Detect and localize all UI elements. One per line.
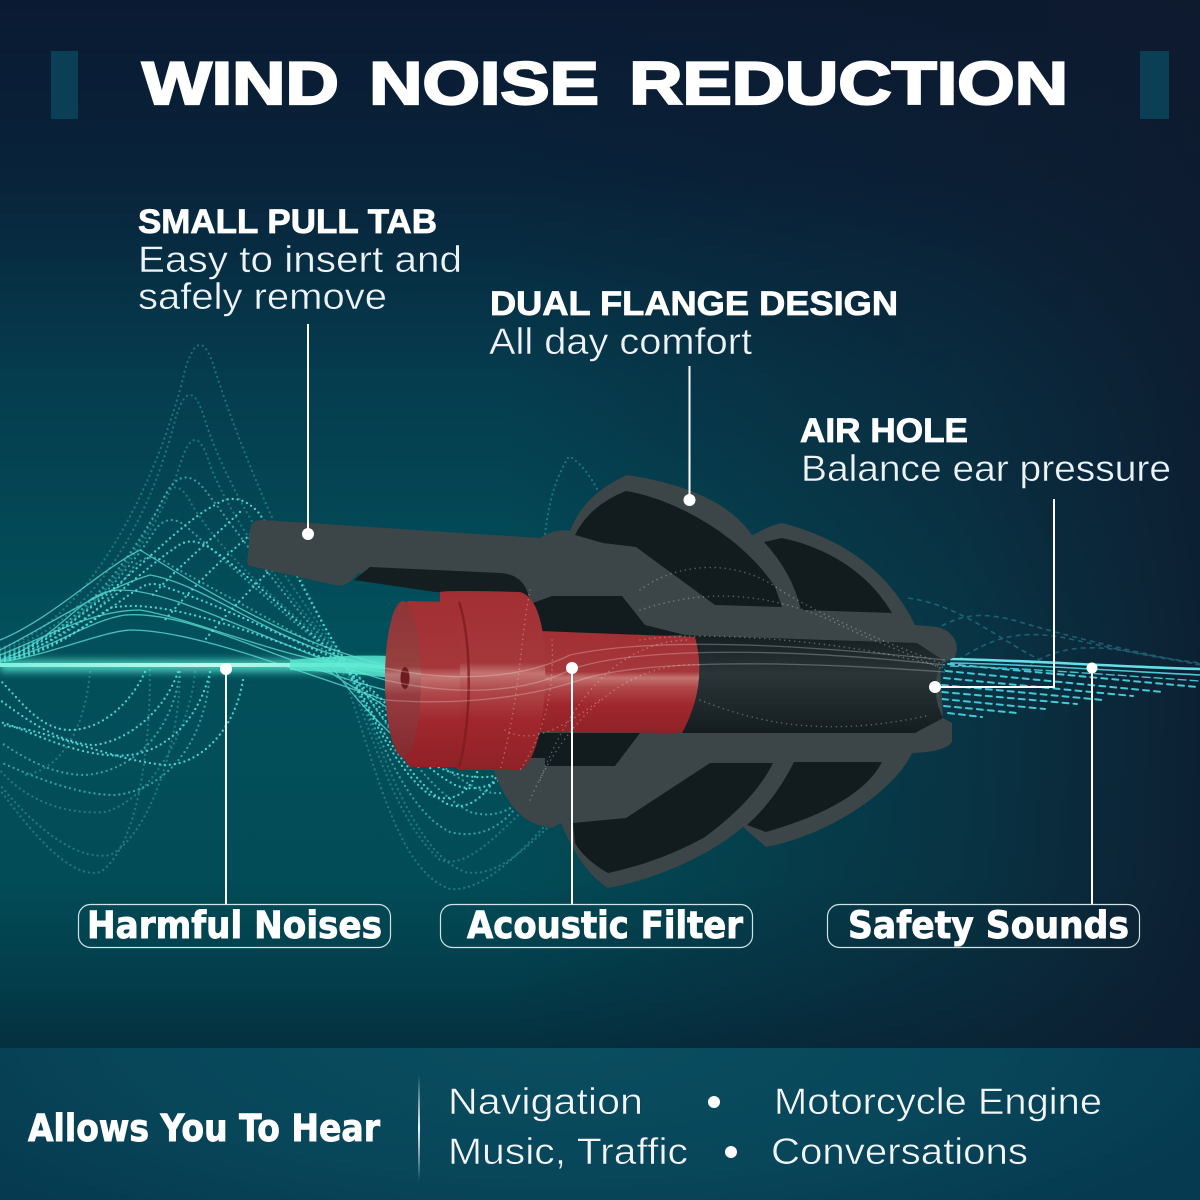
leader: pull tab xyxy=(302,324,314,540)
acoustic filter: red collar xyxy=(440,591,545,770)
title bar right xyxy=(1140,51,1169,119)
title: WIND NOISE REDUCTION xyxy=(142,50,1068,117)
earplug: upper filter housing recess xyxy=(530,596,685,640)
label: harmful noises: Harmful Noises xyxy=(87,904,382,947)
sound wave: harmful noise dotted waves xyxy=(0,345,612,889)
heading: allows you to hear: Allows You To Hear xyxy=(28,1107,381,1150)
callout: small pull tab: safely remove xyxy=(138,276,387,317)
list: conversations: Conversations xyxy=(771,1131,1028,1172)
leader: air hole xyxy=(929,499,1055,693)
list: navigation: Navigation xyxy=(448,1081,643,1122)
callout: air hole xyxy=(800,412,1171,489)
callout: small pull tab: SMALL PULL TAB xyxy=(138,203,437,241)
acoustic filter: air hole xyxy=(400,667,410,689)
callout: dual flange design: DUAL FLANGE DESIGN xyxy=(490,285,898,323)
panel: bottom band xyxy=(0,1048,1200,1200)
earplug: dark recess under pull tab xyxy=(354,567,529,597)
earplug: sound lines passing through xyxy=(385,568,945,800)
sound wave: safety sound waves on the right xyxy=(908,598,1200,717)
label: safety sounds: Safety Sounds xyxy=(848,904,1129,947)
callout: dual flange design xyxy=(489,285,898,362)
acoustic filter: front face xyxy=(385,601,421,757)
divider xyxy=(418,1075,420,1181)
leader: acoustic filter xyxy=(566,662,578,904)
leader: harmful noises xyxy=(220,663,232,904)
earplug: lower second flange cavity xyxy=(747,762,882,832)
earplug: central bore xyxy=(682,635,943,733)
bullet xyxy=(708,1096,720,1108)
leader: flange xyxy=(684,366,696,506)
earplug: grey body shell xyxy=(247,475,957,888)
label: acoustic filter: Acoustic Filter xyxy=(467,904,744,947)
earplug cross-section xyxy=(247,475,957,888)
callout: small pull tab xyxy=(138,203,462,317)
earplug: lower first flange cavity xyxy=(573,763,773,873)
list: motorcycle engine: Motorcycle Engine xyxy=(774,1081,1102,1122)
earplug: upper second flange cavity xyxy=(764,538,892,613)
callout: small pull tab: Easy to insert and xyxy=(138,239,462,280)
acoustic filter: collar step shadow xyxy=(459,602,469,767)
callout: air hole: Balance ear pressure xyxy=(801,448,1171,489)
callout: dual flange design: All day comfort xyxy=(489,321,753,362)
sound wave: bright central beam xyxy=(0,656,390,678)
leader: safety sounds xyxy=(1086,662,1098,904)
title bar left xyxy=(51,51,78,119)
acoustic filter: red front cylinder xyxy=(385,601,460,767)
earplug: lower filter housing recess xyxy=(525,733,640,766)
bullet xyxy=(725,1146,737,1158)
acoustic filter: red shaft xyxy=(540,631,699,733)
callout: air hole: AIR HOLE xyxy=(800,412,968,450)
earplug: upper first flange cavity xyxy=(575,491,782,607)
list: music, traffic: Music, Traffic xyxy=(448,1131,688,1172)
